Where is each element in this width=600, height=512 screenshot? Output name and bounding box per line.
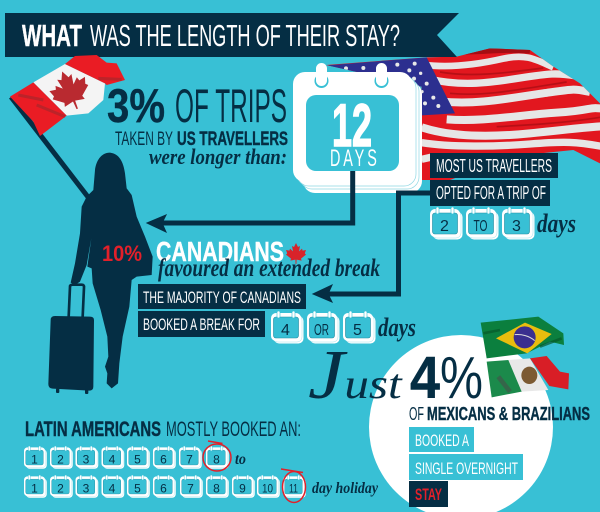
heading: latin americans: MOSTLY BOOKED AN: <box>166 418 301 441</box>
arrow: us travellers to canadians <box>313 193 430 302</box>
label: booked a single overnight stay: SINGLE OVERNIGHT <box>415 459 518 478</box>
calendars: 2 to 3 days: days <box>537 209 576 238</box>
arrow: calendar to woman <box>147 171 353 232</box>
heading: 3% of trips: TAKEN BY <box>115 129 173 150</box>
stat: 4% mexicans and brazilians: OF <box>409 404 424 424</box>
stat: 10% canadians: favoured an extended break <box>158 255 380 282</box>
icon: american flag <box>326 48 600 180</box>
heading: 3% of trips: were longer than: <box>149 144 287 169</box>
label: booked a single overnight stay <box>409 427 523 507</box>
heading: latin americans <box>25 418 301 441</box>
heading: 3% of trips <box>107 79 288 169</box>
calendars: 2 to 3 days: 2 <box>440 218 449 235</box>
heading: 3% of trips: OF TRIPS <box>175 79 287 132</box>
calendars: row 1 to 8: 2 <box>57 452 64 466</box>
label: booked a single overnight stay: STAY <box>415 485 442 504</box>
calendars: row 1 to 8: 8 <box>213 452 220 466</box>
calendars: row 1 to 8: 4 <box>109 452 116 466</box>
label: booked a single overnight stay: BOOKED A <box>415 431 469 450</box>
title banner: WHAT <box>22 18 82 53</box>
label: majority of canadians: THE MAJORITY OF CANADIANS <box>143 288 301 307</box>
calendars: row 1 to 11: 5 <box>134 482 141 496</box>
calendars: 2 to 3 days: 3 <box>512 218 521 235</box>
calendars: 4 or 5 days: 5 <box>353 322 362 339</box>
calendars: row 1 to 8: 1 <box>31 452 38 466</box>
calendars: row 1 to 11: 11 <box>289 482 298 496</box>
calendars: 4 or 5 days: 4 <box>281 322 290 339</box>
stat: 10% canadians <box>102 236 380 282</box>
label: most us travellers <box>430 153 558 206</box>
calendars: row 1 to 11: 6 <box>160 482 167 496</box>
calendars: row 1 to 11: 7 <box>187 482 194 496</box>
calendars: row 1 to 11: day holiday <box>312 480 379 497</box>
calendars: row 1 to 8: 3 <box>83 452 90 466</box>
red circle: day 8 <box>203 441 231 471</box>
icon: big calendar 12 days: 12 <box>332 92 372 159</box>
stat: 10% canadians: 10% <box>102 241 142 266</box>
calendars: row 1 to 11: 9 <box>239 482 246 496</box>
title banner <box>5 13 459 57</box>
heading: 3% of trips: 3% <box>107 79 165 132</box>
calendars: row 1 to 11: 8 <box>213 482 220 496</box>
calendars: 2 to 3 days: TO <box>474 218 488 235</box>
panel: white circle <box>369 335 553 512</box>
calendars: 4 or 5 days <box>271 311 416 344</box>
calendars: row 1 to 8 <box>24 446 246 469</box>
calendars: 4 or 5 days: OR <box>314 322 329 339</box>
calendars: row 1 to 11: 1 <box>31 482 38 496</box>
label: majority of canadians: BOOKED A BREAK FOR <box>143 315 260 334</box>
calendars: row 1 to 11 <box>24 475 379 498</box>
calendars: row 1 to 11: 3 <box>83 482 90 496</box>
label: majority of canadians <box>138 284 306 337</box>
icon: big calendar 12 days: DAYS <box>330 145 377 172</box>
icon: big calendar 12 days <box>293 63 422 193</box>
heading: 3% of trips: US TRAVELLERS <box>177 129 288 150</box>
stat: 4% mexicans and brazilians: % <box>440 345 483 411</box>
stat: 4% mexicans and brazilians <box>409 345 590 424</box>
calendars: row 1 to 11: 2 <box>57 482 64 496</box>
text: just: Just <box>308 336 403 414</box>
calendars: row 1 to 8: 5 <box>134 452 141 466</box>
red circle: day 11 <box>281 469 306 502</box>
icon: mexican flag <box>487 356 569 397</box>
calendars: 2 to 3 days <box>430 207 576 240</box>
icon: canadian flag on pole <box>10 55 125 197</box>
calendars: row 1 to 11: 4 <box>109 482 116 496</box>
calendars: row 1 to 8: to <box>235 451 246 468</box>
icon: brazilian flag <box>481 317 564 358</box>
calendars: 4 or 5 days: days <box>378 313 416 342</box>
calendars: row 1 to 11: 10 <box>262 482 273 496</box>
calendars: row 1 to 8: 6 <box>160 452 167 466</box>
icon: woman silhouette with suitcase <box>48 153 153 394</box>
calendars: row 1 to 8: 7 <box>186 452 193 466</box>
stat: 4% mexicans and brazilians: 4 <box>410 345 440 411</box>
heading: latin americans: LATIN AMERICANS <box>25 418 161 441</box>
stat: 10% canadians: CANADIANS <box>156 236 284 267</box>
